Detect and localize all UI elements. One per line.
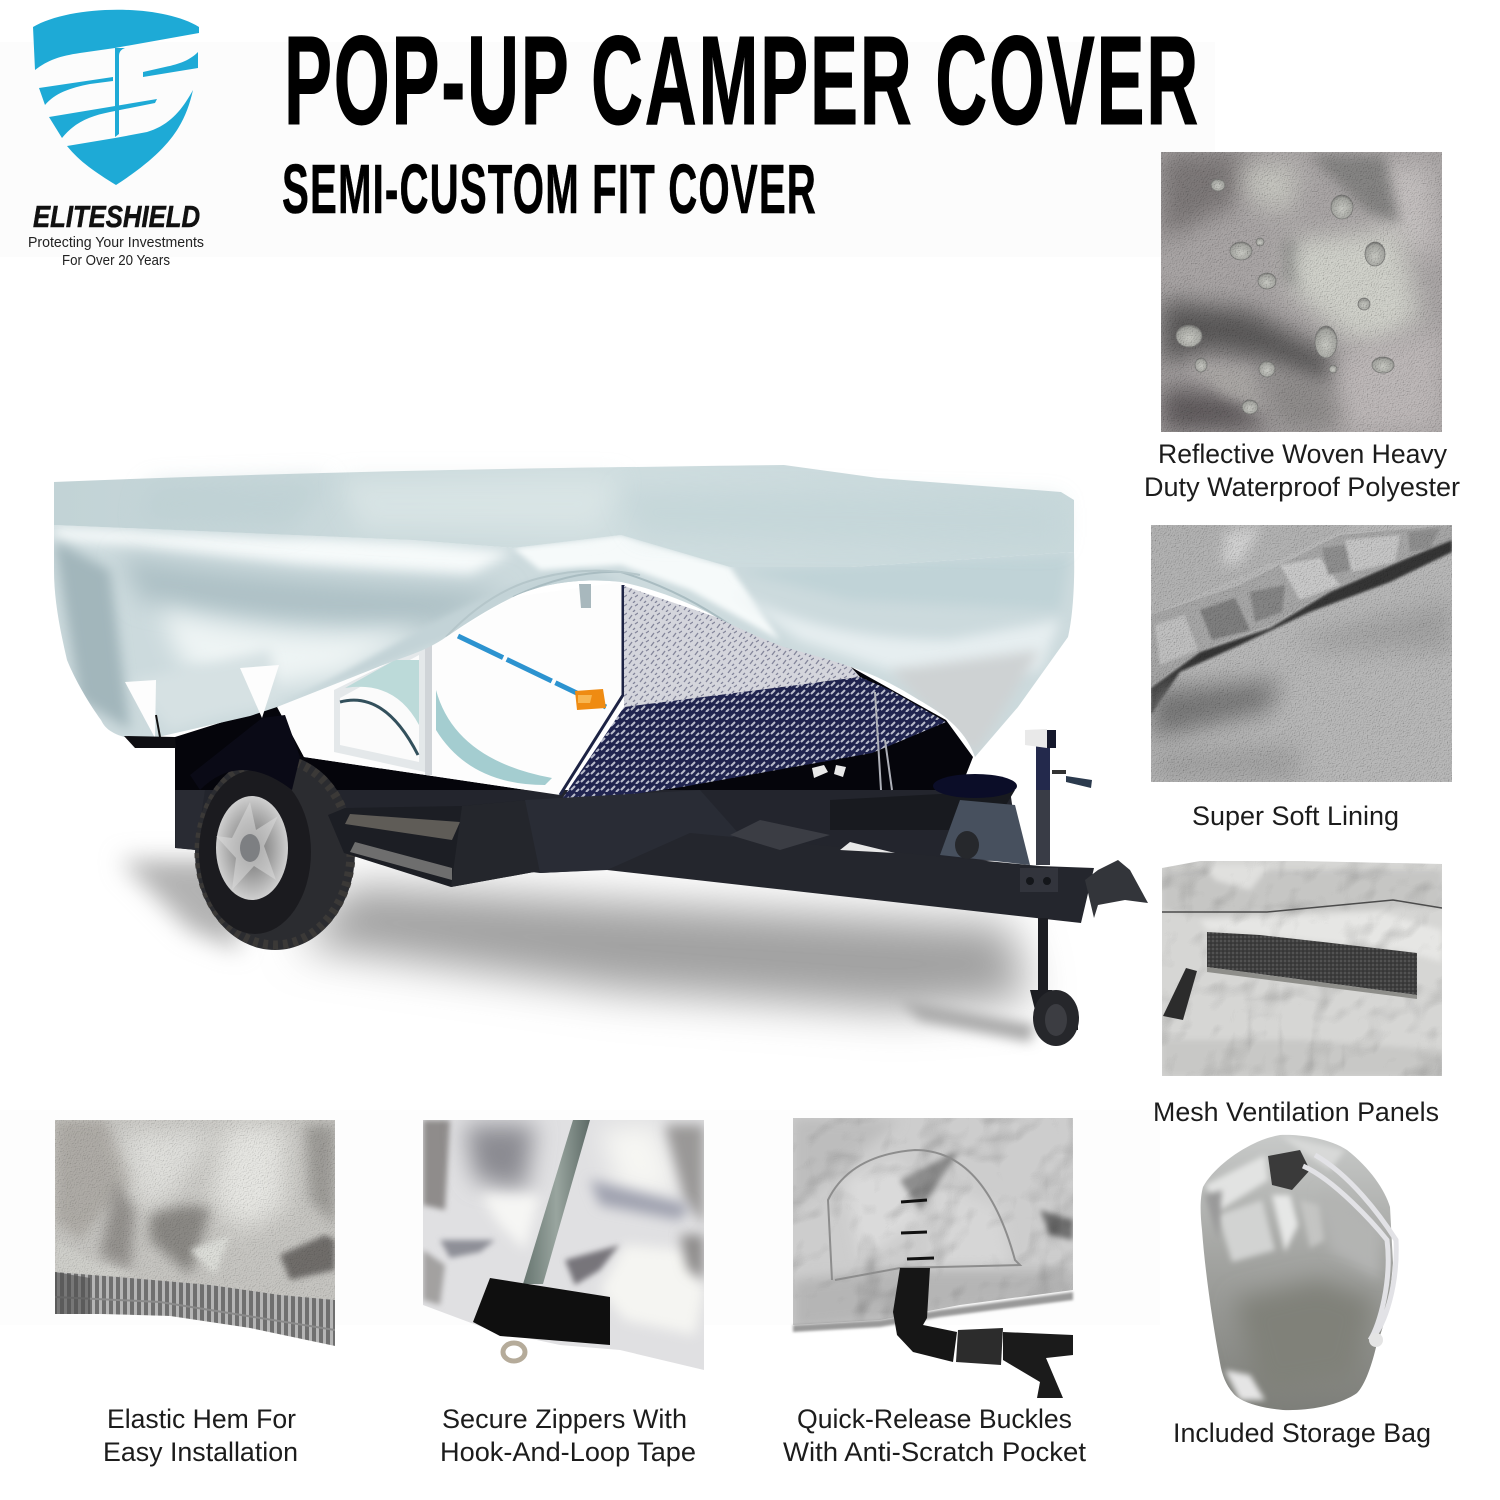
- panel: zipper swatch: [423, 1120, 704, 1375]
- zipper pull ring: [503, 1343, 525, 1361]
- window: [334, 640, 432, 775]
- skirt folds and highlights: [54, 527, 1070, 757]
- teal swoosh: [436, 690, 552, 785]
- door latch: [579, 584, 591, 608]
- frame rear plate: [525, 790, 740, 873]
- caption: mesh panels: Mesh Ventilation Panels: [1153, 1097, 1439, 1127]
- caption: zippers: Hook-And-Loop Tape: [440, 1437, 696, 1467]
- caption: waterproof polyester: [1144, 439, 1460, 502]
- ground shadow: [120, 860, 1035, 1042]
- hitch coupler: [1085, 860, 1148, 918]
- camper body: [277, 582, 624, 795]
- shadow under cover edge: [793, 1292, 1073, 1332]
- cover lower skirt: [40, 520, 1090, 770]
- panel: soft lining swatch: [1151, 525, 1452, 782]
- caption: zippers: [440, 1404, 696, 1467]
- cord toggle: [1369, 1333, 1383, 1347]
- panel: mesh ventilation swatch: [1162, 861, 1442, 1076]
- caption: elastic hem: Easy Installation: [103, 1437, 298, 1467]
- orange marker light: [575, 689, 606, 710]
- white small parts: [812, 765, 846, 778]
- blue stripe: [458, 636, 606, 707]
- white hem triangles: [125, 665, 279, 738]
- flap seam: [1162, 900, 1442, 912]
- crumpled texture: [1162, 861, 1442, 1076]
- diamond plate upper: [624, 586, 860, 707]
- bag body: [1195, 1130, 1400, 1415]
- caption: elastic hem: Elastic Hem For: [107, 1404, 296, 1434]
- jack post: [1020, 729, 1092, 892]
- webbing band: [473, 1278, 610, 1345]
- panel: storage bag: [1195, 1130, 1400, 1415]
- fold-out steps: [328, 800, 545, 887]
- caption: storage bag: Included Storage Bag: [1173, 1418, 1431, 1448]
- wheel: [195, 754, 355, 950]
- strap stitches: [901, 1200, 934, 1259]
- wheel arch and chassis black: [175, 667, 973, 795]
- cord: [1303, 1155, 1396, 1340]
- gathered hem: [1151, 525, 1452, 685]
- main illustration: covered pop-up camper: [40, 465, 1148, 1046]
- icon: shield: [33, 10, 199, 185]
- caption: waterproof polyester: Reflective Woven Heavy: [1158, 439, 1447, 469]
- main tongue beam: [607, 833, 1094, 923]
- fabric folds: [1161, 152, 1442, 432]
- caption: soft lining: Super Soft Lining: [1192, 801, 1399, 831]
- door edge and plate edge: [560, 585, 623, 795]
- panel: buckle swatch: [793, 1118, 1073, 1398]
- top panel shading: [140, 478, 1060, 545]
- mesh border: [1207, 967, 1417, 999]
- caption: buckles: With Anti-Scratch Pocket: [783, 1437, 1087, 1467]
- fender: [176, 790, 205, 850]
- caption: buckles: Quick-Release Buckles: [797, 1404, 1072, 1434]
- caption: buckles: [783, 1404, 1087, 1467]
- mesh opening: [1207, 932, 1417, 995]
- strap with buckle: [893, 1268, 1073, 1398]
- water droplets: [1176, 179, 1394, 414]
- caption: waterproof polyester: Duty Waterproof Polyester: [1144, 472, 1460, 502]
- strap: [1163, 968, 1197, 1020]
- subtitle: SEMI-CUSTOM FIT COVER: [282, 150, 817, 228]
- caption: elastic hem: [103, 1404, 298, 1467]
- cover top panel: [54, 465, 1074, 567]
- propane plate and tank: [730, 774, 1030, 865]
- caption: zippers: Secure Zippers With: [442, 1404, 687, 1434]
- elastic band: [55, 1272, 335, 1346]
- lower jack and caster wheel: [1030, 918, 1079, 1046]
- panel: elastic hem swatch: [55, 1120, 335, 1350]
- diamond plate lower: [558, 677, 946, 805]
- tagline line one: Protecting Your Investments: [28, 235, 204, 251]
- drawstring neck: [1268, 1150, 1310, 1190]
- tagline line two: For Over 20 Years: [62, 253, 170, 269]
- zipper track: [523, 1120, 590, 1284]
- grey rods: [875, 692, 892, 790]
- upper fabric: [1151, 525, 1352, 615]
- under-cover black lip: [124, 736, 176, 748]
- chassis lower dark: [175, 790, 1020, 873]
- panel: waterproof fabric swatch: [1161, 152, 1442, 432]
- lower shade: [1151, 680, 1280, 740]
- hem shadow: [1151, 540, 1452, 715]
- pocket outline: [828, 1150, 1020, 1280]
- brand name: ELITESHIELD: [33, 199, 200, 234]
- logo: EliteShield: [28, 10, 204, 269]
- tyre top under arch: [190, 715, 300, 790]
